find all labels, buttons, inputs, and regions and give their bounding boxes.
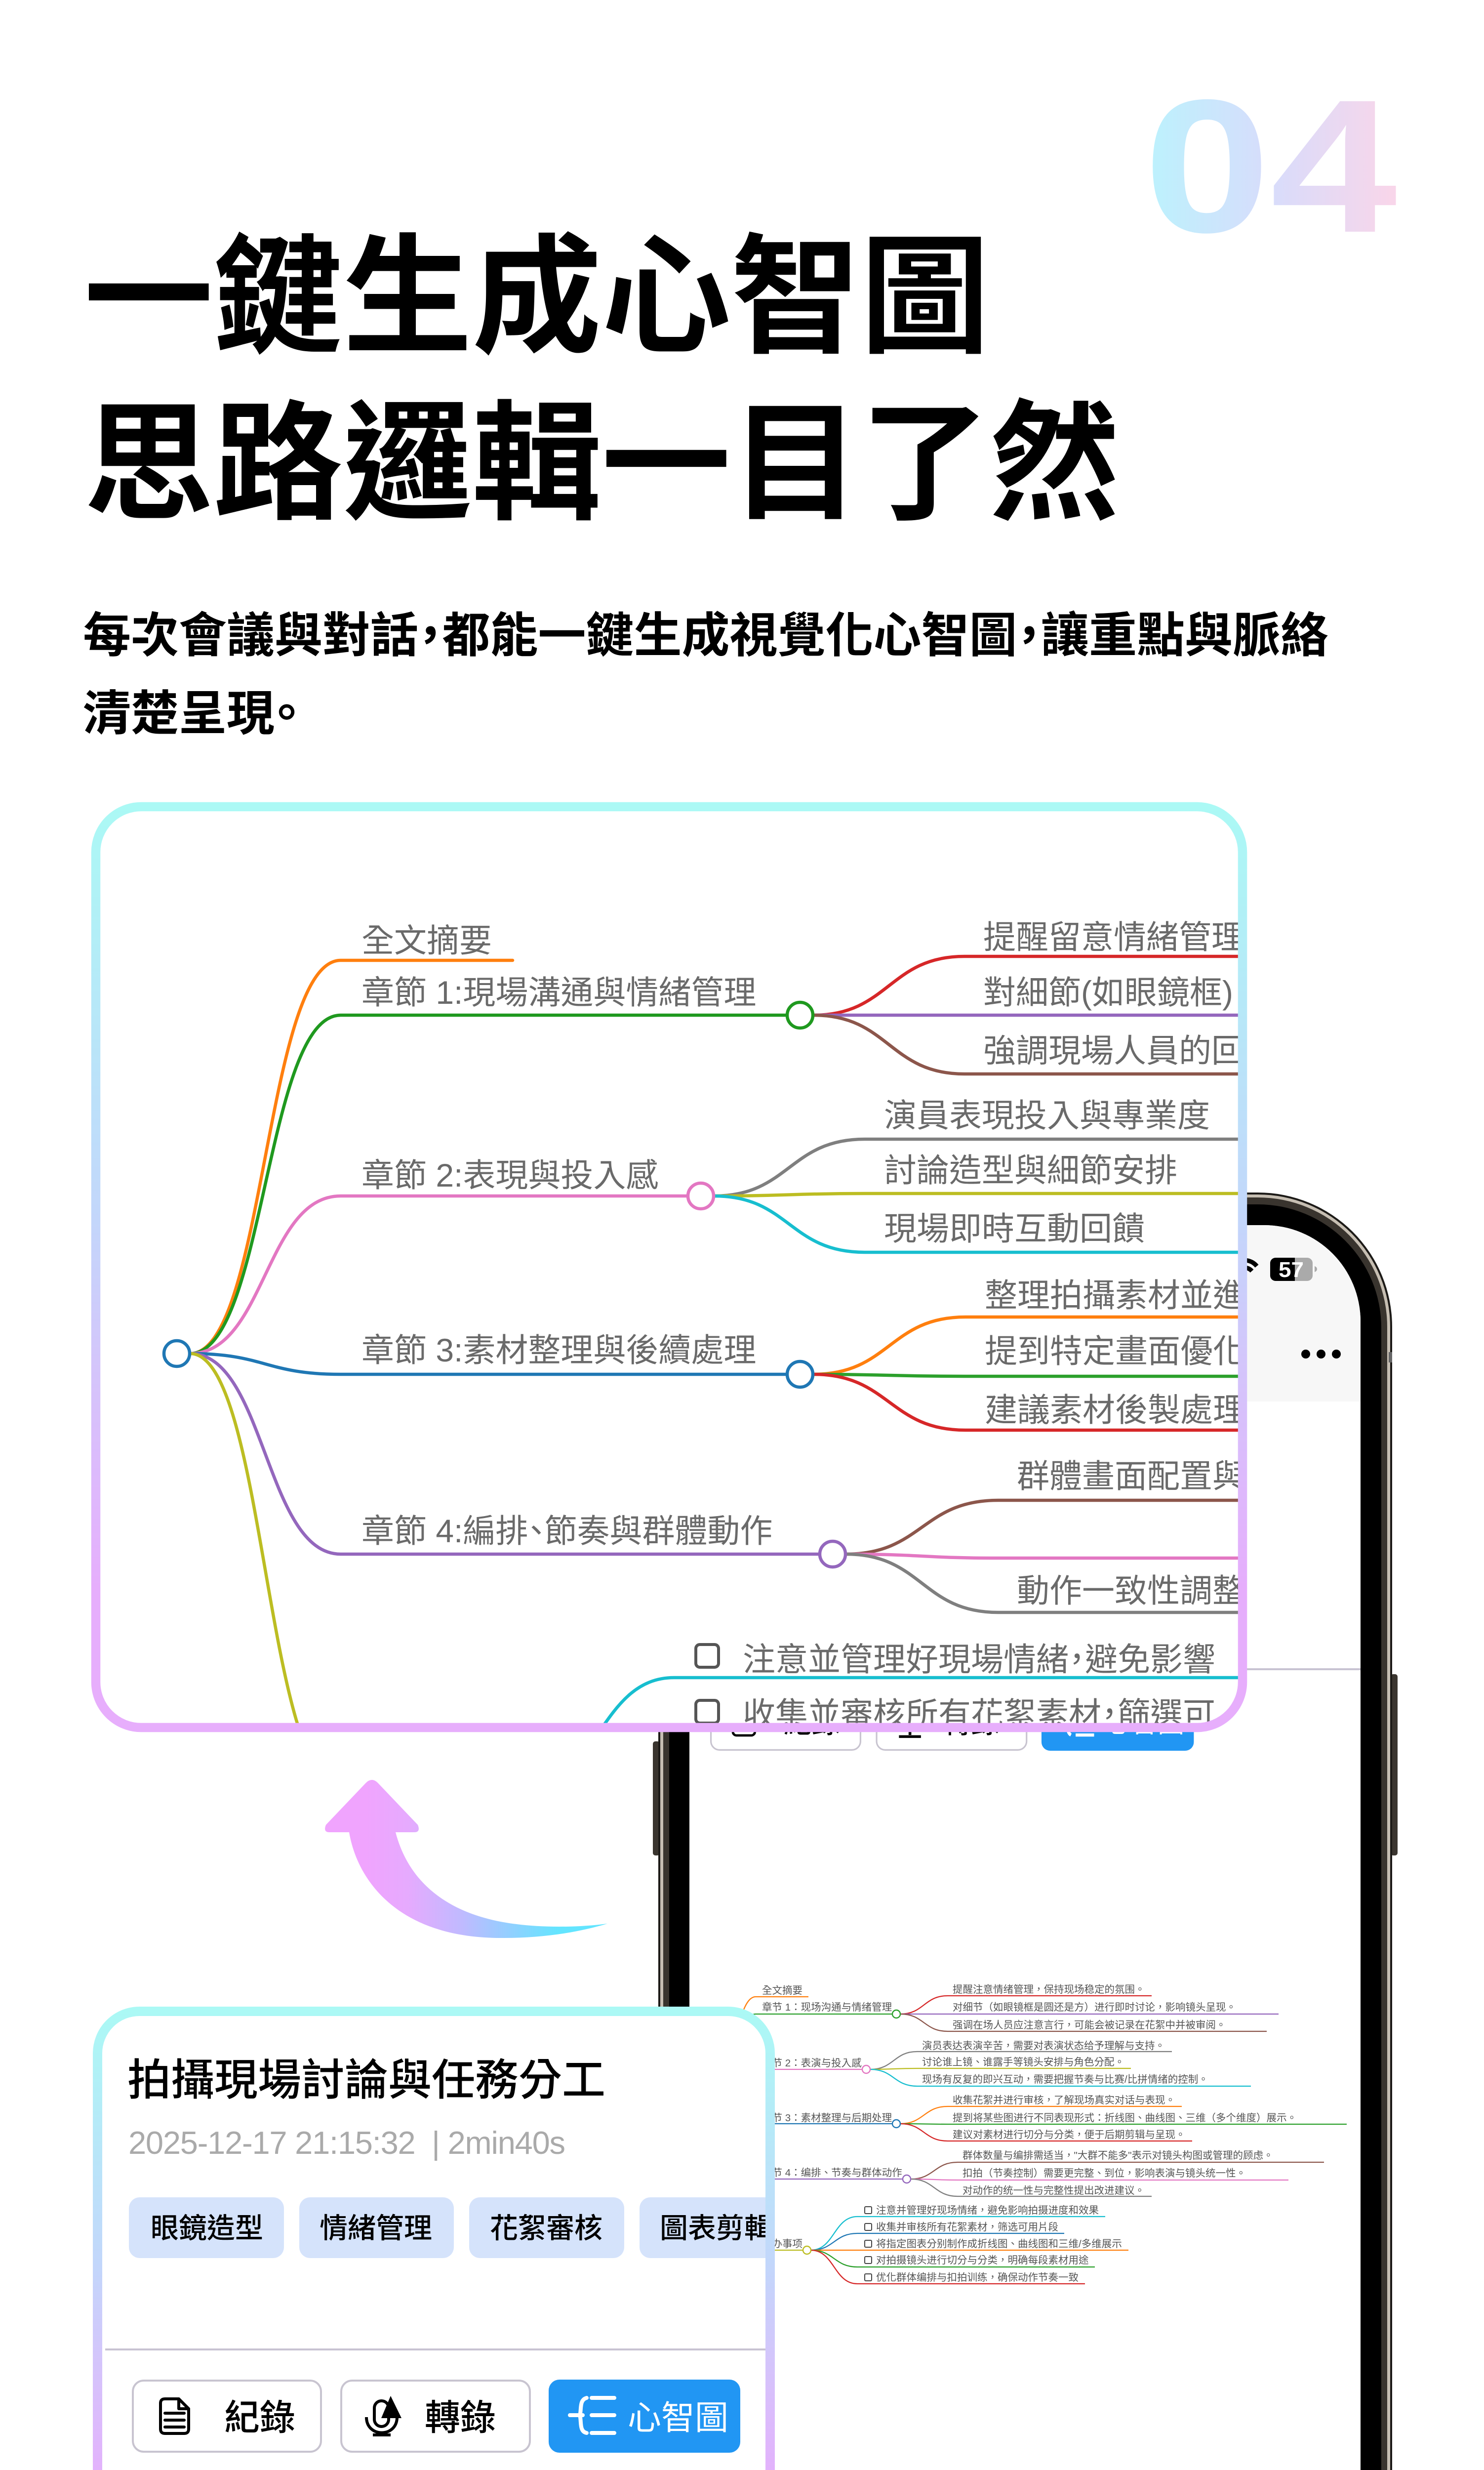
tag: 圖表剪輯 [640, 2197, 795, 2258]
phone map chapter labels: 待办事项 [762, 2238, 802, 2250]
card title: 拍攝現場討論與任務分工 [127, 2056, 605, 2104]
root links [190, 960, 822, 1786]
card divider [105, 2348, 767, 2350]
phone map chapter 2 branch: 讨论谁上镜、谁露手等镜头安排与角色分配。 [922, 2057, 1124, 2068]
chapter 2 branch: 現場即時互動回饋 [884, 1210, 1145, 1247]
chapter 4 branch: 章節 4:編排、節奏與群體動作 [361, 1513, 772, 1549]
phone map chapter 2 branch [862, 2040, 1251, 2086]
phone mind map [709, 1983, 1347, 2284]
phone map to-do branch: 优化群体编排与扣拍训练，确保动作节奏一致 [876, 2272, 1079, 2283]
phone map chapter labels: 章节 1：现场沟通与情绪管理 [762, 2002, 892, 2013]
phone map chapter 4 branch: 扣拍（节奏控制）需要更完整、到位，影响表演与镜头统一性。 [963, 2168, 1246, 2179]
phone side buttons [653, 1674, 1398, 1855]
chapter 2 branch [361, 1097, 1249, 1252]
phone map to-do branch [803, 2205, 1128, 2284]
button: 轉錄 [341, 2381, 530, 2452]
phone map chapter 2 branch: 现场有反复的即兴互动，需要把握节奏与比赛/比拼情绪的控制。 [922, 2074, 1208, 2085]
battery indicator: 57 [1279, 1258, 1304, 1282]
phone map chapter 1 branch: 强调在场人员应注意言行，可能会被记录在花絮中并被审阅。 [953, 2019, 1226, 2031]
panel border [96, 807, 1243, 1728]
subtitle text [83, 609, 1328, 741]
tag: 情緒管理: 情緒管理 [320, 2213, 432, 2244]
chapter 1 branch [361, 919, 1249, 1074]
chapter 4 branch [361, 1458, 1249, 1612]
phone map chapter 3 branch: 收集花絮并进行审核，了解现场真实对话与表现。 [953, 2095, 1175, 2106]
title: 一鍵生成心智圖 [84, 225, 990, 370]
chapter 4 branch: 動作一致性調整 [1017, 1572, 1245, 1609]
chapter 1 branch: 提醒留意情緒管理 [983, 919, 1244, 955]
summary branch label: 全文摘要 [361, 922, 492, 959]
title [84, 225, 1119, 536]
chapter 4 branch: 群體畫面配置與 [1017, 1458, 1245, 1494]
screen header [1265, 1225, 1361, 1319]
tag: 花絮審核 [469, 2197, 624, 2258]
tag: 花絮審核: 花絮審核 [490, 2213, 602, 2244]
chapter 2 branch: 章節 2:表現與投入感 [361, 1157, 658, 1194]
to-do branch [524, 1641, 1249, 1786]
card date and duration: 2025-12-17 21:15:32 | 2min40s [128, 2125, 565, 2161]
card border [98, 2012, 770, 2470]
phone map to-do branch: 收集并审核所有花絮素材，筛选可用片段 [876, 2222, 1058, 2233]
phone tab buttons: 心智圖 [1104, 1709, 1184, 1738]
chapter 3 branch: 提到特定畫面優化 [985, 1333, 1245, 1369]
button: 心智圖 [549, 2380, 740, 2453]
chapter 3 branch: 建議素材後製處理 [985, 1392, 1245, 1428]
phone map root links [743, 1996, 902, 2251]
phone map chapter 3 branch: 建议对素材进行切分与分类，便于后期剪辑与呈现。 [953, 2129, 1185, 2141]
tag: 情緒管理 [299, 2197, 454, 2258]
tag: 圖表剪輯: 圖表剪輯 [660, 2213, 772, 2244]
phone map chapter 1 branch: 对细节（如眼镜框是圆还是方）进行即时讨论，影响镜头呈现。 [953, 2002, 1236, 2013]
subtitle text: 每次會議與對話，都能一鍵生成視覺化心智圖，讓重點與脈絡 [83, 609, 1328, 662]
tag: 眼鏡造型: 眼鏡造型 [151, 2213, 263, 2244]
phone map chapter 4 branch: 群体数量与编排需适当，"大群不能多"表示对镜头构图或管理的顾虑。 [963, 2150, 1274, 2161]
icon: microphone [366, 2396, 401, 2435]
phone map chapter 3 branch: 提到将某些图进行不同表现形式：折线图、曲线图、三维（多个维度）展示。 [953, 2112, 1297, 2124]
phone map chapter labels [762, 1985, 902, 2250]
phone tab buttons [710, 1732, 1194, 1751]
arrow: from card up to mind map [325, 1780, 607, 1938]
phone map chapter labels: 章节 2：表演与投入感 [762, 2058, 862, 2069]
section number 04: 04 [1144, 60, 1399, 272]
phone map chapter labels: 全文摘要 [762, 1985, 802, 1996]
title: 思路邏輯一目了然 [84, 392, 1119, 536]
button: 紀錄: 紀錄 [224, 2398, 295, 2438]
phone map chapter 4 branch: 对动作的统一性与完整性提出改进建议。 [963, 2185, 1145, 2196]
button: 心智圖: 心智圖 [628, 2399, 728, 2437]
phone map chapter 2 branch: 演员表达表演辛苦，需要对表演状态给予理解与支持。 [922, 2040, 1165, 2052]
chapter 3 branch: 章節 3:素材整理與後續處理 [361, 1332, 756, 1368]
phone tab buttons: 轉錄 [943, 1707, 1000, 1739]
button: 轉錄: 轉錄 [425, 2398, 496, 2438]
phone frame [658, 1193, 1392, 2470]
to-do branch: 收集並審核所有花絮素材，篩選可 [743, 1696, 1215, 1732]
phone map chapter 3 branch [892, 2095, 1347, 2141]
phone map chapter labels: 章节 3：素材整理与后期处理 [762, 2112, 892, 2124]
phone map to-do branch: 对拍摄镜头进行切分与分类，明确每段素材用途 [876, 2255, 1088, 2266]
subtitle text: 清楚呈現。 [83, 687, 298, 741]
panel: enlarged mind map [96, 807, 1249, 1786]
chapter 1 branch: 章節 1:現場溝通與情緒管理 [361, 974, 756, 1011]
chapter 2 branch: 討論造型與細節安排 [884, 1152, 1177, 1189]
more menu dots [1301, 1350, 1341, 1358]
battery indicator [1270, 1258, 1317, 1282]
to-do branch: 注意並管理好現場情緒，避免影響 [743, 1641, 1215, 1678]
icon: mind map [570, 2398, 614, 2433]
phone mockup [653, 1193, 1398, 2470]
phone map to-do branch: 将指定图表分别制作成折线图、曲线图和三维/多维展示 [876, 2238, 1122, 2250]
phone map chapter 1 branch [892, 1983, 1279, 2031]
phone map to-do branch: 注意并管理好现场情绪，避免影响拍摄进度和效果 [876, 2205, 1099, 2216]
phone map chapter labels: 章节 4：编排、节奏与群体动作 [762, 2167, 902, 2179]
chapter 1 branch: 強調現場人員的回 [983, 1032, 1244, 1069]
status bar wifi icon [1247, 1258, 1258, 1273]
button: 紀錄 [133, 2381, 321, 2452]
phone map chapter 4 branch [903, 2150, 1324, 2196]
chapter 2 branch: 演員表現投入與專業度 [884, 1097, 1210, 1134]
chapter 3 branch [361, 1277, 1249, 1430]
screen divider [1247, 1668, 1361, 1670]
icon: document [160, 2399, 189, 2433]
panel: recording card [98, 2012, 795, 2470]
tag: 眼鏡造型 [129, 2197, 284, 2258]
chapter 3 branch: 整理拍攝素材並進 [985, 1277, 1245, 1314]
phone map chapter 1 branch: 提醒注意情绪管理，保持现场稳定的氛围。 [953, 1983, 1145, 1995]
phone screen [689, 1225, 1361, 2470]
phone tab buttons: 紀錄 [784, 1707, 840, 1739]
root node [164, 1341, 190, 1366]
chapter 1 branch: 對細節(如眼鏡框) [983, 974, 1233, 1011]
